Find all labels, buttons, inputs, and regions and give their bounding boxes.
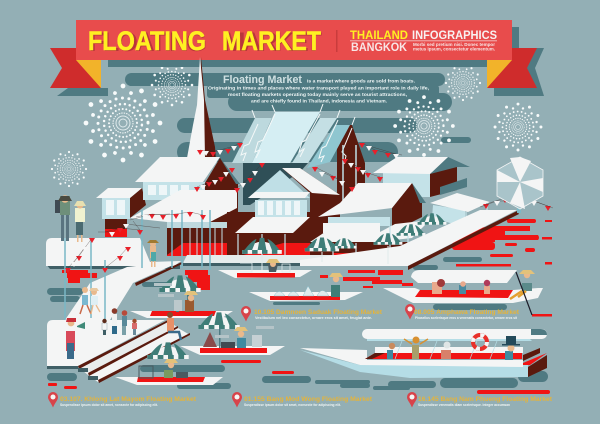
boat: vendor with goods bbox=[115, 342, 223, 385]
location labels: 03.107. Khlong Lat Mayom Floating Market bbox=[60, 396, 197, 403]
person: guide with megaphone bbox=[66, 318, 85, 359]
location labels: 16.145 Bang Nam Phueng Floating Market bbox=[418, 396, 553, 403]
boat: produce bbox=[249, 273, 363, 301]
boat: vendor with pots bbox=[130, 275, 233, 318]
location labels: Suspendisse ipsum dolor sit amet, nonsecte for adipiscing elit. bbox=[60, 403, 158, 407]
people: family bbox=[102, 308, 137, 335]
location labels bbox=[48, 304, 553, 408]
fireworks bbox=[52, 64, 542, 186]
people: couple on walkway bbox=[80, 287, 100, 314]
intro text: is a market where goods are sold from boats. bbox=[307, 79, 415, 84]
house: left small bbox=[96, 188, 146, 237]
boardwalk and piers bbox=[46, 210, 519, 383]
header ribbon bbox=[50, 20, 544, 96]
umbrellas on the walkway bbox=[242, 213, 446, 272]
intro text bbox=[208, 74, 429, 103]
subtitle block: metus ipsum, consectetur elementum. bbox=[413, 46, 495, 52]
people: tourists bbox=[55, 195, 86, 242]
bunting bbox=[68, 143, 553, 268]
title: MARKET bbox=[222, 26, 321, 56]
boat: long tail with paddler bbox=[383, 270, 543, 315]
subtitle block: Morbi sed pretium nisi. Donec tempor bbox=[413, 42, 495, 47]
location labels: Phasellus scelerisque eros a venenatis consectetur, ornare eros sit bbox=[415, 316, 518, 320]
boat: vendor with fruit bbox=[180, 312, 285, 355]
subtitle block bbox=[350, 28, 497, 54]
boat: large tour boat bbox=[300, 329, 547, 378]
windmill bbox=[497, 157, 543, 213]
dark water bands bbox=[47, 257, 548, 390]
intro text: Originating in times and places where water transport played an important role in daily life, bbox=[208, 86, 429, 90]
title: FLOATING bbox=[89, 27, 207, 57]
intro text: Floating Market bbox=[223, 74, 302, 86]
location labels: 08.005 Amphawa Floating Market bbox=[414, 309, 520, 316]
person: sitting on steps bbox=[167, 312, 181, 340]
location labels: 10.105 Damnoen Saduak Floating Market bbox=[254, 309, 383, 316]
house: centre bbox=[227, 168, 340, 262]
red water reflections bbox=[48, 219, 552, 394]
house: far right bbox=[373, 157, 490, 232]
title bbox=[88, 26, 322, 57]
title: FLOATING bbox=[88, 26, 206, 56]
location labels: Suspendisse ipsum dolor sit amet, nonsecte for adipiscing elit. bbox=[244, 403, 341, 407]
boat: top centre bbox=[218, 259, 312, 278]
subtitle block: INFOGRAPHICS bbox=[412, 28, 497, 42]
intro text: most floating markets operating today mainly serve as tourist attractions, bbox=[228, 92, 407, 97]
subtitle block: BANGKOK bbox=[351, 40, 407, 54]
subtitle block: THAILAND bbox=[350, 28, 408, 42]
location labels: Vestibulum vel leo consectetur, ornare eros sit amet, feugiat ante. bbox=[255, 316, 372, 320]
cloud bands behind header bbox=[125, 73, 471, 162]
location labels: 01.155 Bang Mod Wong Floating Market bbox=[244, 396, 373, 403]
location labels: Suspendisse venenatis diam scelerisque. Integer accumsan bbox=[418, 403, 510, 407]
title: MARKET bbox=[223, 27, 322, 57]
person: walker on pier bbox=[147, 240, 159, 267]
house: centre left bbox=[130, 157, 240, 256]
house: right centre bbox=[310, 183, 430, 265]
intro text: and are chiefly found in Thailand, Indonesia and Vietnam. bbox=[251, 98, 387, 103]
temple bbox=[187, 57, 365, 205]
